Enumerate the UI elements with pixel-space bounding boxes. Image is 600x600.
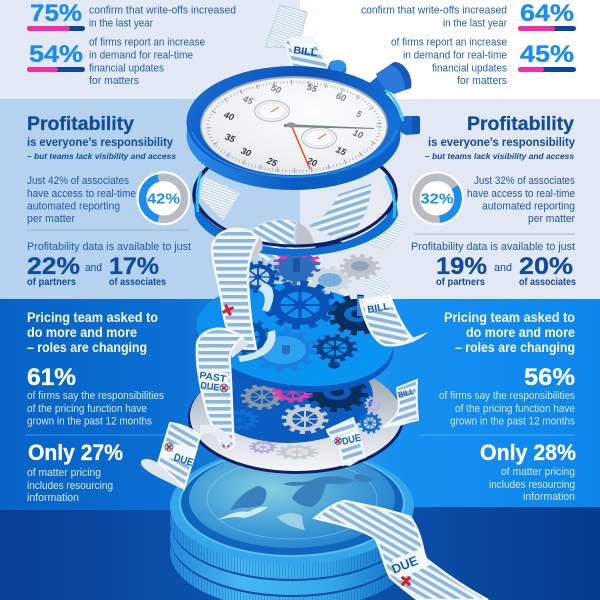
dial numbers: 45 bbox=[241, 93, 255, 107]
donut chart 42 percent: 42% bbox=[147, 192, 180, 208]
text: real-time reporting bbox=[27, 175, 136, 225]
receipt: rear right ribbon bbox=[308, 183, 387, 243]
dial numbers: 50 bbox=[269, 82, 283, 96]
illustration: stopwatch bbox=[186, 59, 420, 190]
text: write-offs right: in the last year bbox=[443, 18, 507, 30]
receipt: bottom DUE ribbon bbox=[315, 501, 488, 600]
lower gears bbox=[223, 376, 381, 459]
stats: partners and associates: 17% bbox=[109, 253, 159, 280]
text: resourcing right: includes resourcing bbox=[489, 479, 575, 491]
text: demand right: financial updates bbox=[432, 62, 507, 74]
stats: partners and associates: of associates bbox=[109, 276, 166, 288]
dial numbers: 35 bbox=[223, 131, 237, 145]
illustration: upper gear disc bbox=[191, 255, 399, 403]
donut chart 32 percent bbox=[408, 169, 466, 227]
text: demand right bbox=[391, 36, 507, 87]
receipt: left DUE ribbon bbox=[141, 423, 232, 489]
progress bar 64 percent bbox=[518, 26, 576, 31]
stat: only 27 percent: Only 27% bbox=[28, 440, 123, 465]
panel: left write-offs stats bbox=[27, 0, 236, 87]
icon: red cross badge bbox=[334, 438, 342, 444]
heading: – but teams lack visibility and access bbox=[27, 151, 176, 161]
text: responsibilities right bbox=[439, 390, 575, 428]
text: resourcing: information bbox=[27, 492, 79, 504]
icon: red cross bbox=[402, 577, 410, 585]
stat: 61 percent: 61% bbox=[27, 364, 76, 391]
text: real-time reporting right: automated reporting bbox=[482, 200, 575, 212]
receipt: right DUE bbox=[327, 418, 376, 466]
receipt: bottom DUE ribbon: DUE bbox=[390, 553, 420, 577]
knob: top small bbox=[326, 59, 348, 79]
heading right: – roles are changing bbox=[455, 340, 575, 355]
stats: partners and associates: of partners bbox=[27, 276, 76, 288]
paper: left sheet bbox=[200, 177, 240, 220]
text: resourcing right: of matter pricing bbox=[501, 466, 575, 478]
text: responsibilities: grown in the past 12 months bbox=[27, 416, 152, 428]
progress bar 54 percent bbox=[27, 67, 85, 72]
text: resourcing bbox=[27, 467, 113, 504]
text: demand: financial updates bbox=[89, 62, 164, 74]
text: write-offs right: confirm that write-offs increased bbox=[361, 4, 507, 16]
icon: red cross badge bbox=[165, 443, 173, 451]
text: write-offs right bbox=[361, 4, 507, 30]
dial numbers: 25 bbox=[265, 155, 279, 169]
text: data availability: Profitability data is available to just bbox=[27, 241, 191, 253]
ring: stopwatch lower ring front bbox=[194, 172, 398, 256]
receipt: top BILL bbox=[285, 36, 330, 90]
text: demand right: in demand for real-time bbox=[403, 50, 507, 62]
heading right: – but teams lack visibility and access bbox=[425, 151, 574, 161]
dial numbers: 60 bbox=[334, 90, 348, 104]
heading: – roles are changing bbox=[27, 340, 147, 355]
paper: top text sheet bbox=[265, 5, 307, 48]
text: demand: in demand for real-time bbox=[89, 50, 193, 62]
receipt: top BILL: BILL bbox=[293, 45, 318, 59]
panel: right profitability bbox=[408, 113, 576, 288]
text: demand: of firms report an increase bbox=[89, 36, 205, 48]
knob: crown bbox=[366, 62, 411, 99]
text: real-time reporting: per matter bbox=[27, 213, 75, 225]
heading: is everyone’s responsibility bbox=[27, 137, 174, 149]
receipt: PAST DUE ribbon bbox=[197, 329, 248, 449]
stats: partners and associates: 22% bbox=[27, 253, 80, 280]
dial numbers: 5 bbox=[355, 108, 364, 120]
receipt: BILL on gear disc: BILL bbox=[367, 301, 390, 316]
text: real-time reporting: have access to real-time bbox=[27, 188, 136, 200]
text: real-time reporting right: Just 32% of associates bbox=[474, 175, 575, 187]
receipt: left DUE ribbon: DUE bbox=[172, 451, 195, 469]
paper: right sheet bbox=[362, 213, 405, 250]
text: real-time reporting: Just 42% of associates bbox=[27, 175, 129, 187]
icon: red cross bbox=[223, 305, 233, 315]
text: responsibilities: of the pricing function have bbox=[27, 403, 147, 415]
text: demand bbox=[89, 36, 205, 87]
text: responsibilities bbox=[27, 390, 164, 428]
icon: red cross badge bbox=[220, 384, 228, 392]
text: data availability right: Profitability data is available to just bbox=[411, 241, 575, 253]
illustration: base coin with globe bbox=[170, 448, 414, 600]
illustration: pink gear behind ring bbox=[276, 252, 318, 272]
receipt: PAST DUE ribbon: DUE bbox=[200, 380, 220, 394]
text: resourcing right bbox=[489, 466, 575, 503]
text: responsibilities right: of firms say the responsibilities bbox=[439, 390, 575, 402]
stat: only 28 percent: Only 28% bbox=[480, 440, 576, 465]
heading right bbox=[444, 310, 575, 355]
text: resourcing: includes resourcing bbox=[27, 480, 113, 492]
stats: partners and associates right: of partners bbox=[436, 276, 485, 288]
gears on disc bbox=[226, 255, 383, 370]
dial numbers: 20 bbox=[305, 155, 319, 169]
stat: 45 percent: 45% bbox=[520, 41, 574, 68]
stats: partners and associates right: of associates bbox=[519, 276, 576, 288]
text: resourcing: of matter pricing bbox=[27, 467, 101, 479]
panel: right pricing team bbox=[420, 310, 576, 503]
receipt: right BILL bbox=[383, 380, 418, 427]
heading: do more and more bbox=[27, 325, 137, 340]
text: responsibilities: of firms say the responsibilities bbox=[27, 390, 164, 402]
heading bbox=[27, 310, 158, 355]
knob: right small bbox=[397, 116, 420, 135]
stat: 54 percent: 54% bbox=[29, 41, 83, 68]
text: demand right: for matters bbox=[457, 75, 507, 87]
stat: 64 percent: 64% bbox=[520, 0, 574, 27]
receipt: right DUE: DUE bbox=[341, 433, 362, 448]
stat: 75 percent: 75% bbox=[30, 0, 82, 27]
text: write-offs bbox=[89, 4, 236, 30]
stats: partners and associates: and bbox=[85, 262, 102, 274]
dial numbers: 40 bbox=[222, 109, 236, 123]
dial ticks bbox=[208, 82, 380, 171]
heading bbox=[27, 113, 176, 161]
heading: Profitability bbox=[27, 113, 134, 135]
text: write-offs: in the last year bbox=[89, 18, 153, 30]
heading: Pricing team asked to bbox=[27, 310, 158, 325]
subdial left bbox=[254, 100, 290, 122]
receipt: PAST DUE ribbon: PAST bbox=[199, 370, 227, 385]
text: responsibilities right: of the pricing function have bbox=[455, 403, 575, 415]
progress bar 75 percent bbox=[27, 26, 85, 31]
subdial right bbox=[302, 128, 336, 148]
receipt: right BILL: BILL bbox=[397, 386, 415, 400]
receipt: rear left ribbon bbox=[252, 220, 316, 262]
receipt: long ribbon with red mark bbox=[212, 229, 263, 349]
text: demand right: of firms report an increase bbox=[391, 36, 507, 48]
donut chart 42 percent bbox=[136, 171, 190, 225]
heading right bbox=[425, 113, 576, 161]
stats: partners and associates right: and bbox=[494, 262, 512, 274]
donut chart 32 percent: 32% bbox=[420, 192, 454, 208]
text: demand: for matters bbox=[89, 75, 139, 87]
globe continents bbox=[218, 474, 374, 530]
panel: left pricing team bbox=[25, 310, 165, 504]
text: write-offs: confirm that write-offs increased bbox=[89, 4, 236, 16]
stats: partners and associates right: 20% bbox=[519, 253, 573, 280]
illustration: gray bowl layer with inner disc bbox=[188, 349, 404, 474]
dial numbers: 15 bbox=[334, 144, 348, 158]
dial numbers: 10 bbox=[351, 127, 365, 141]
text: resourcing right: information bbox=[523, 491, 575, 503]
stats: partners and associates right bbox=[436, 253, 576, 288]
text: real-time reporting right bbox=[467, 175, 575, 225]
text: real-time reporting: automated reporting bbox=[27, 200, 120, 212]
dial numbers: 30 bbox=[239, 145, 253, 159]
ring: stopwatch lower ring back bbox=[194, 141, 396, 249]
receipt: BILL on gear disc bbox=[357, 296, 428, 346]
icon: red cross badge bottom bbox=[221, 439, 231, 449]
heading right: Pricing team asked to bbox=[444, 310, 575, 325]
heading right: Profitability bbox=[467, 113, 574, 135]
stat: 56 percent: 56% bbox=[524, 364, 575, 391]
stats: partners and associates right: 19% bbox=[436, 253, 487, 280]
heading right: is everyone’s responsibility bbox=[428, 137, 576, 149]
heading right: do more and more bbox=[466, 325, 575, 340]
dial numbers bbox=[222, 82, 365, 169]
panel: left profitability bbox=[27, 113, 191, 288]
text: real-time reporting right: have access to real-time bbox=[467, 188, 575, 200]
progress bar 45 percent bbox=[518, 67, 576, 72]
dial numbers: 55 bbox=[306, 82, 319, 95]
text: real-time reporting right: per matter bbox=[528, 213, 575, 225]
paper: sheet by gear bbox=[363, 275, 390, 295]
text: responsibilities right: grown in the past 12 months bbox=[450, 416, 575, 428]
panel: right write-offs stats bbox=[361, 0, 576, 87]
stats: partners and associates bbox=[27, 253, 166, 288]
stopwatch hands bbox=[284, 122, 374, 169]
